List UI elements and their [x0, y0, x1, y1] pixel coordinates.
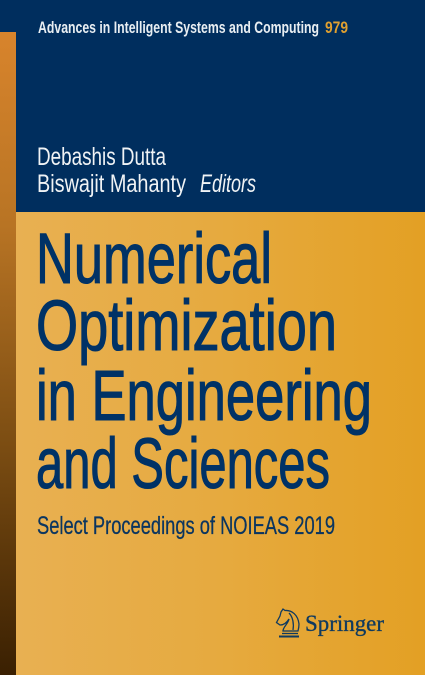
springer logo — [276, 609, 384, 636]
wordmark: Springer — [305, 611, 384, 636]
icon: chess knight — [276, 609, 299, 636]
orange title panel — [16, 212, 425, 675]
main title: Optimization — [36, 287, 337, 366]
left spine strip — [0, 32, 16, 675]
series title: Advances in Intelligent Systems and Computing — [38, 18, 319, 37]
editor name 2: Biswajit Mahanty — [37, 170, 186, 198]
navy header panel — [0, 0, 425, 212]
editor name 1: Debashis Dutta — [37, 143, 166, 171]
editors label: Editors — [200, 170, 256, 198]
main title — [36, 220, 372, 504]
main title: Numerical — [36, 220, 272, 299]
series number: 979 — [325, 18, 348, 37]
